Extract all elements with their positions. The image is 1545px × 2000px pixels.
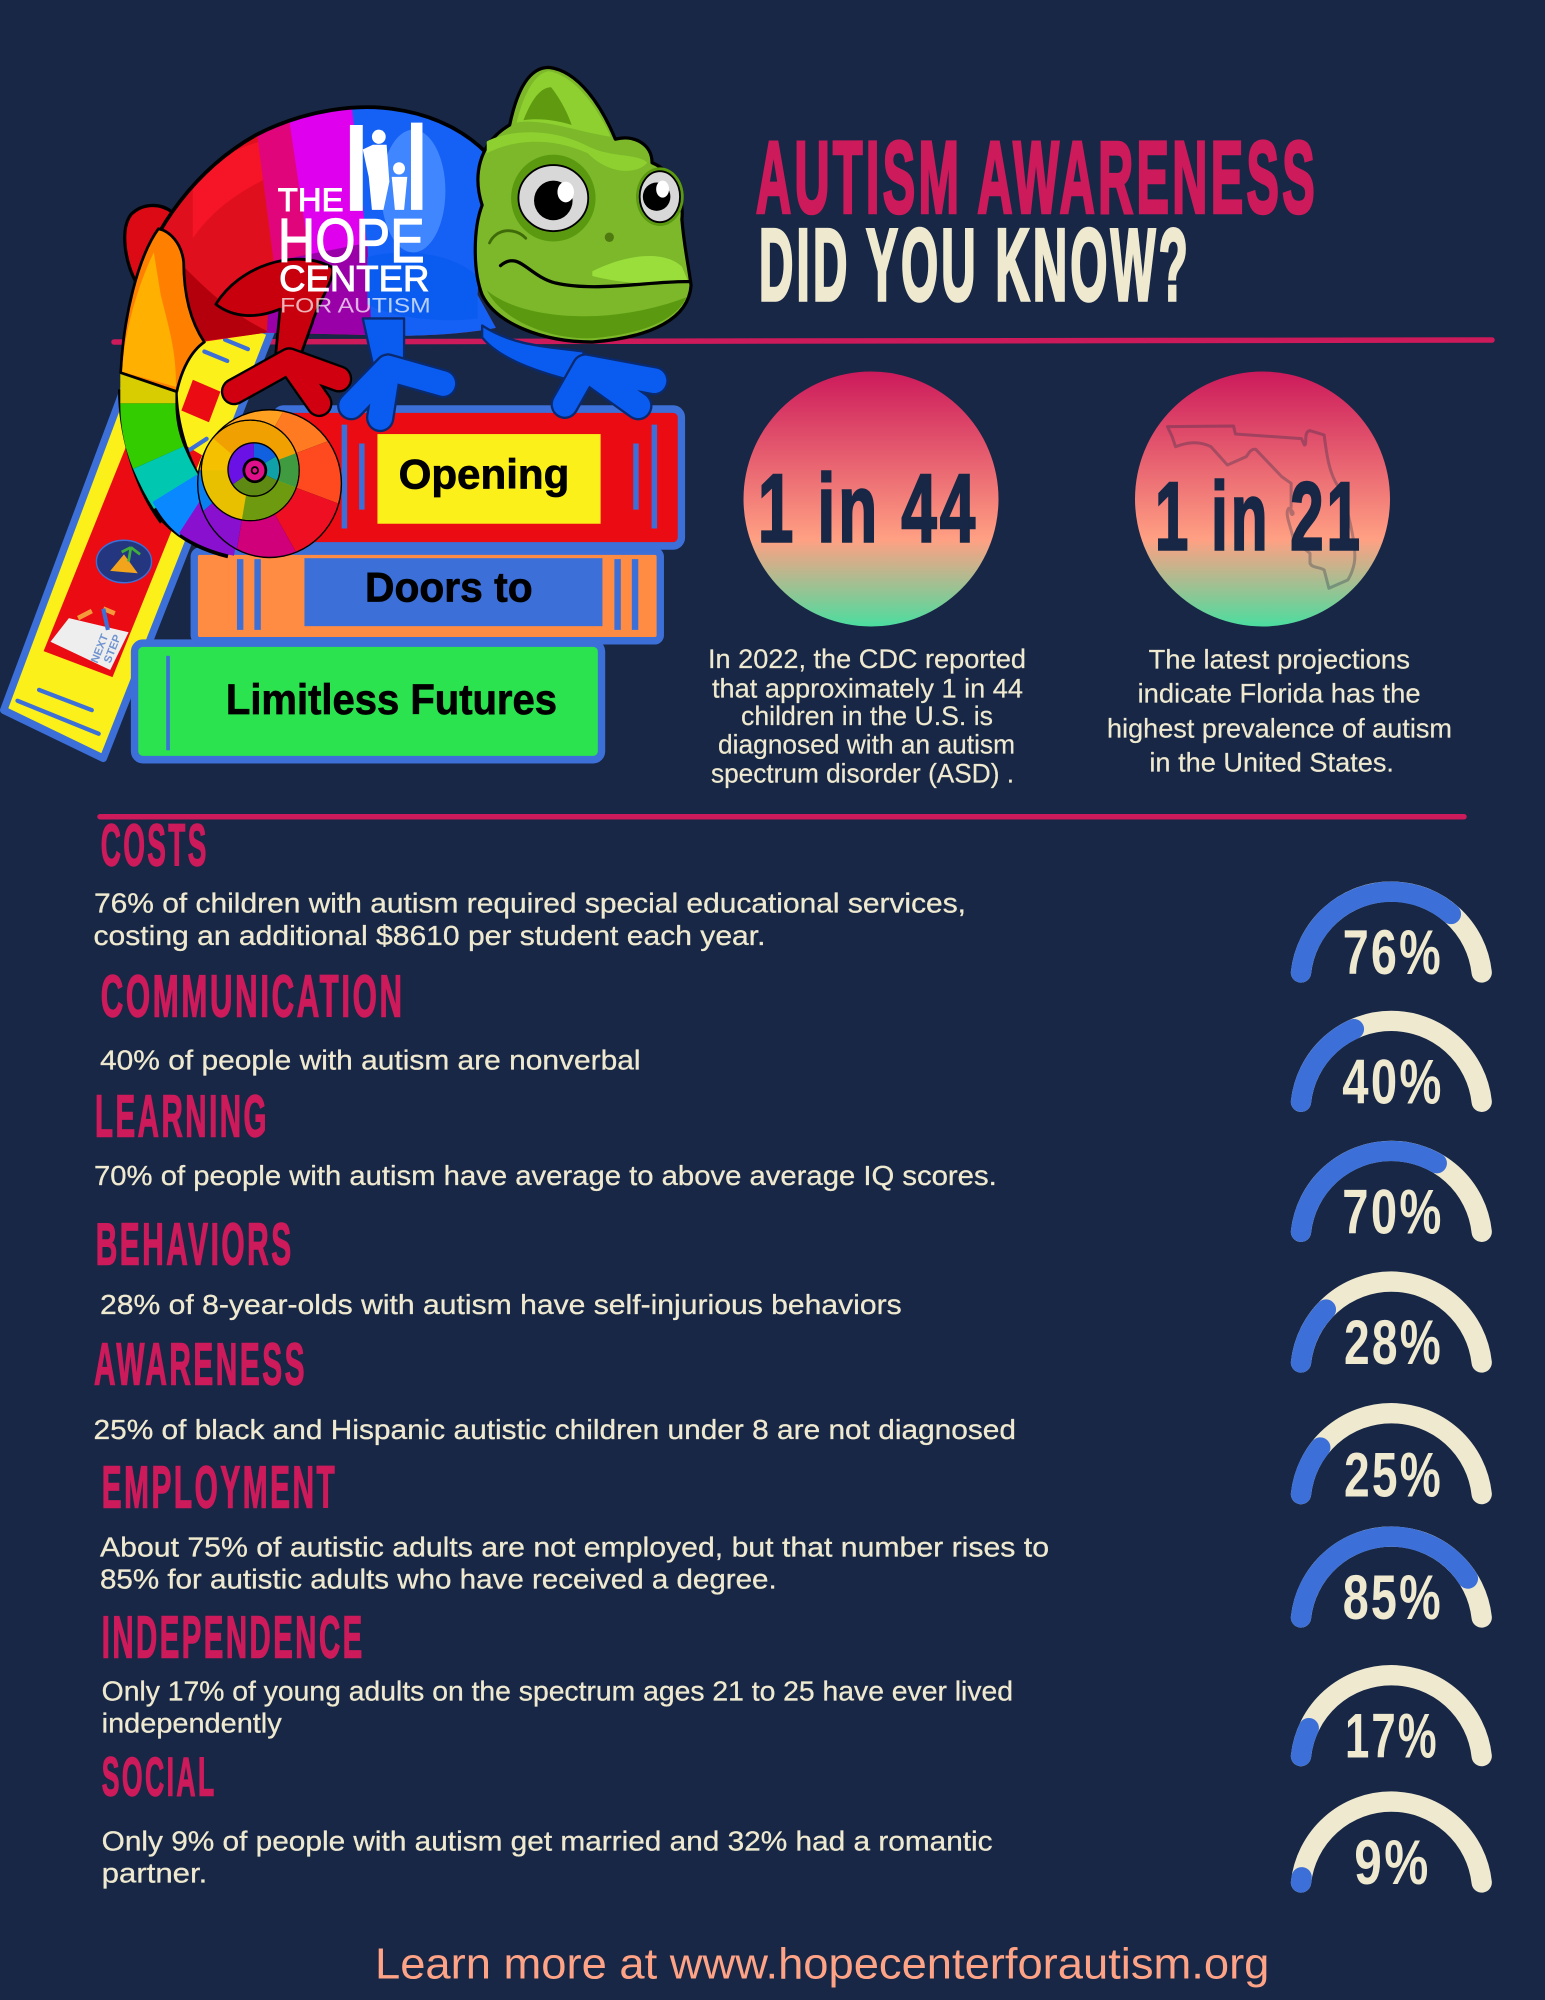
section: learning: 70% of people with autism have average to above average IQ scores.	[94, 1160, 997, 1191]
red book: Opening: Opening	[399, 451, 569, 497]
eye: large	[511, 155, 596, 242]
section: employment	[100, 1455, 1049, 1594]
orange book: Doors to	[194, 551, 660, 641]
logo: The Hope Center for Autism	[278, 123, 431, 317]
section: communication	[100, 964, 640, 1075]
stat circle: 1 in 44	[744, 372, 998, 626]
section: employment: EMPLOYMENT	[102, 1455, 337, 1521]
section: behaviors: BEHAVIORS	[96, 1211, 294, 1277]
section: employment: About 75% of autistic adults are not employed, but that number rises to	[100, 1532, 1049, 1563]
red book: Opening	[276, 409, 681, 546]
section: communication: COMMUNICATION	[101, 964, 405, 1030]
section: behaviors	[96, 1211, 902, 1320]
chameleon	[121, 67, 691, 587]
rainbow tail	[121, 229, 239, 531]
section: social: partner.	[102, 1858, 207, 1889]
section: awareness	[94, 1331, 1016, 1445]
section: costs	[94, 812, 966, 951]
section divider line	[100, 814, 1464, 819]
section: independence: Only 17% of young adults on the spectrum ages 21 to 25 have ever lived	[102, 1676, 1013, 1707]
blue middle leg	[351, 318, 443, 418]
title	[756, 121, 1318, 322]
section: behaviors: 28% of 8-year-olds with autism have self-injurious behaviors	[100, 1289, 902, 1320]
gauge: 28%: 28%	[1344, 1308, 1443, 1378]
top divider line	[114, 340, 1492, 342]
illustration: chameleon on books	[4, 67, 691, 760]
gauge: 70%	[1301, 1151, 1482, 1247]
stat caption: 1 in 21	[1107, 644, 1452, 778]
section: costs: 76% of children with autism required special educational services,	[94, 888, 966, 919]
section: learning	[94, 1084, 997, 1191]
logo: The Hope Center for Autism: THE	[278, 181, 343, 218]
section: communication: 40% of people with autism are nonverbal	[100, 1044, 640, 1075]
green book: Limitless Futures	[135, 643, 602, 760]
tail spiral	[197, 409, 342, 558]
leaning yellow book	[4, 290, 271, 758]
sticker: next step	[51, 609, 129, 670]
gauge: 17%	[1301, 1675, 1482, 1771]
gauge: 76%: 76%	[1343, 918, 1443, 988]
green head	[475, 67, 691, 342]
sticker: island badge	[96, 540, 152, 583]
rainbow body	[160, 105, 496, 342]
gauge: 9%	[1301, 1802, 1482, 1898]
stat caption: 1 in 44: children in the U.S. is	[741, 701, 993, 731]
gauge: 76%	[1301, 892, 1482, 988]
stat circle: 1 in 44: 1 in 44	[758, 456, 978, 563]
section: awareness: AWARENESS	[94, 1331, 307, 1397]
section: social: Only 9% of people with autism get married and 32% had a romantic	[102, 1826, 993, 1857]
section: independence	[102, 1605, 1013, 1739]
gauge: 17%: 17%	[1345, 1701, 1439, 1771]
stat caption: 1 in 21: in the United States.	[1149, 748, 1394, 778]
far red leg	[216, 259, 339, 403]
section: social: SOCIAL	[102, 1745, 217, 1807]
sticker: next step: NEXT	[89, 632, 111, 665]
back leg hump	[125, 205, 172, 285]
gauge: 40%	[1301, 1021, 1482, 1117]
stat caption: 1 in 44: spectrum disorder (ASD) .	[711, 759, 1014, 789]
eye: small	[636, 167, 684, 226]
stat caption: 1 in 44: that approximately 1 in 44	[712, 673, 1023, 703]
section: costs: costing an additional $8610 per student each year.	[94, 920, 766, 951]
section: independence: INDEPENDENCE	[102, 1605, 365, 1671]
section: employment: 85% for autistic adults who have received a degree.	[100, 1563, 777, 1594]
stat circle: 1 in 21 with Florida outline: 1 in 21	[1155, 463, 1363, 570]
gauge: 25%	[1301, 1413, 1482, 1511]
gauge: 85%	[1301, 1537, 1482, 1633]
gauge: 9%: 9%	[1354, 1828, 1431, 1898]
section: social	[102, 1745, 993, 1889]
stat caption: 1 in 44: diagnosed with an autism	[718, 729, 1015, 759]
stat caption: 1 in 21: indicate Florida has the	[1138, 679, 1421, 709]
logo: The Hope Center for Autism: HOPE	[278, 206, 425, 276]
orange book: Doors to: Doors to	[365, 564, 533, 611]
gauge: 70%: 70%	[1342, 1177, 1444, 1247]
footer call to action: Learn more at www.hopecenterforautism.org	[375, 1939, 1269, 1988]
section: awareness: 25% of black and Hispanic autistic children under 8 are not diagnosed	[94, 1414, 1016, 1445]
stat caption: 1 in 21: highest prevalence of autism	[1107, 713, 1452, 743]
section: independence: independently	[102, 1708, 282, 1739]
stat caption: 1 in 21: The latest projections	[1148, 644, 1410, 674]
gauge: 85%: 85%	[1343, 1563, 1443, 1633]
stat caption: 1 in 44: In 2022, the CDC reported	[708, 644, 1026, 674]
gauge: 40%: 40%	[1342, 1047, 1444, 1117]
logo: The Hope Center for Autism: FOR AUTISM	[280, 293, 431, 317]
section: costs: COSTS	[101, 812, 209, 878]
gauge: 25%: 25%	[1344, 1441, 1443, 1511]
section: learning: LEARNING	[95, 1084, 269, 1150]
logo: The Hope Center for Autism: CENTER	[279, 260, 429, 299]
green book: Limitless Futures: Limitless Futures	[226, 675, 557, 723]
gauge: 28%	[1301, 1282, 1482, 1378]
icon: Florida outline	[1167, 426, 1355, 588]
stat caption: 1 in 44	[708, 644, 1026, 789]
blue right leg	[482, 326, 654, 406]
sticker: next step: STEP	[102, 633, 124, 665]
stat circle: 1 in 21 with Florida outline	[1135, 372, 1390, 626]
